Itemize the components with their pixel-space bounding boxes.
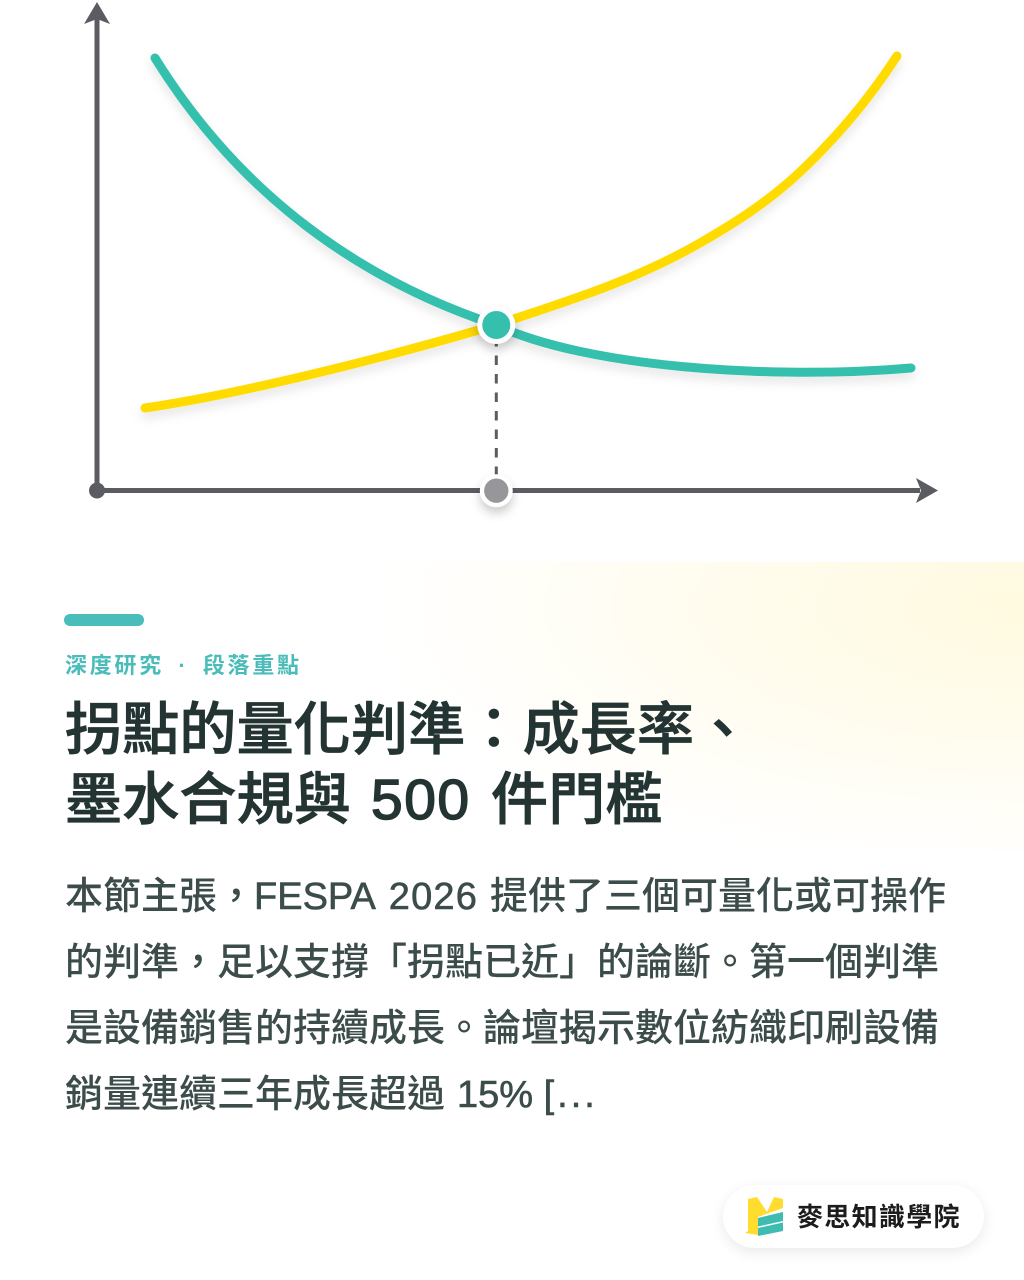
brand name: 麥思知識學院 <box>797 1202 961 1232</box>
chart <box>84 2 938 517</box>
accent bar <box>64 614 144 626</box>
brand badge <box>723 1185 984 1248</box>
body text: 本節主張， 提供了三個可量化或可操作 <box>65 876 946 918</box>
teal curve <box>155 58 911 372</box>
vertical axis <box>84 2 110 490</box>
title <box>65 698 751 832</box>
yellow curve <box>145 56 897 408</box>
background glow <box>360 562 1024 852</box>
body text <box>65 876 946 1116</box>
dashed guide line <box>495 337 498 475</box>
body text: 銷量連續三年成長超過 15% [... <box>65 1074 598 1116</box>
eyebrow label: 深度研究 · 段落重點 <box>65 653 302 678</box>
intersection point <box>480 308 513 342</box>
horizontal axis <box>89 478 938 503</box>
body text: FESPA 2026 <box>254 876 478 918</box>
body text: 的判準，足以支撐「拐點已近」的論斷。第一個判準 <box>65 942 939 984</box>
title: 拐點的量化判準：成長率、 <box>65 698 751 762</box>
axis marker point <box>482 476 511 505</box>
body text: 是設備銷售的持續成長。論壇揭示數位紡織印刷設備 <box>65 1008 939 1050</box>
icon: brand logo <box>745 1197 783 1236</box>
title: 500 <box>371 768 471 832</box>
title: 墨水合規與 件門檻 <box>65 768 663 832</box>
